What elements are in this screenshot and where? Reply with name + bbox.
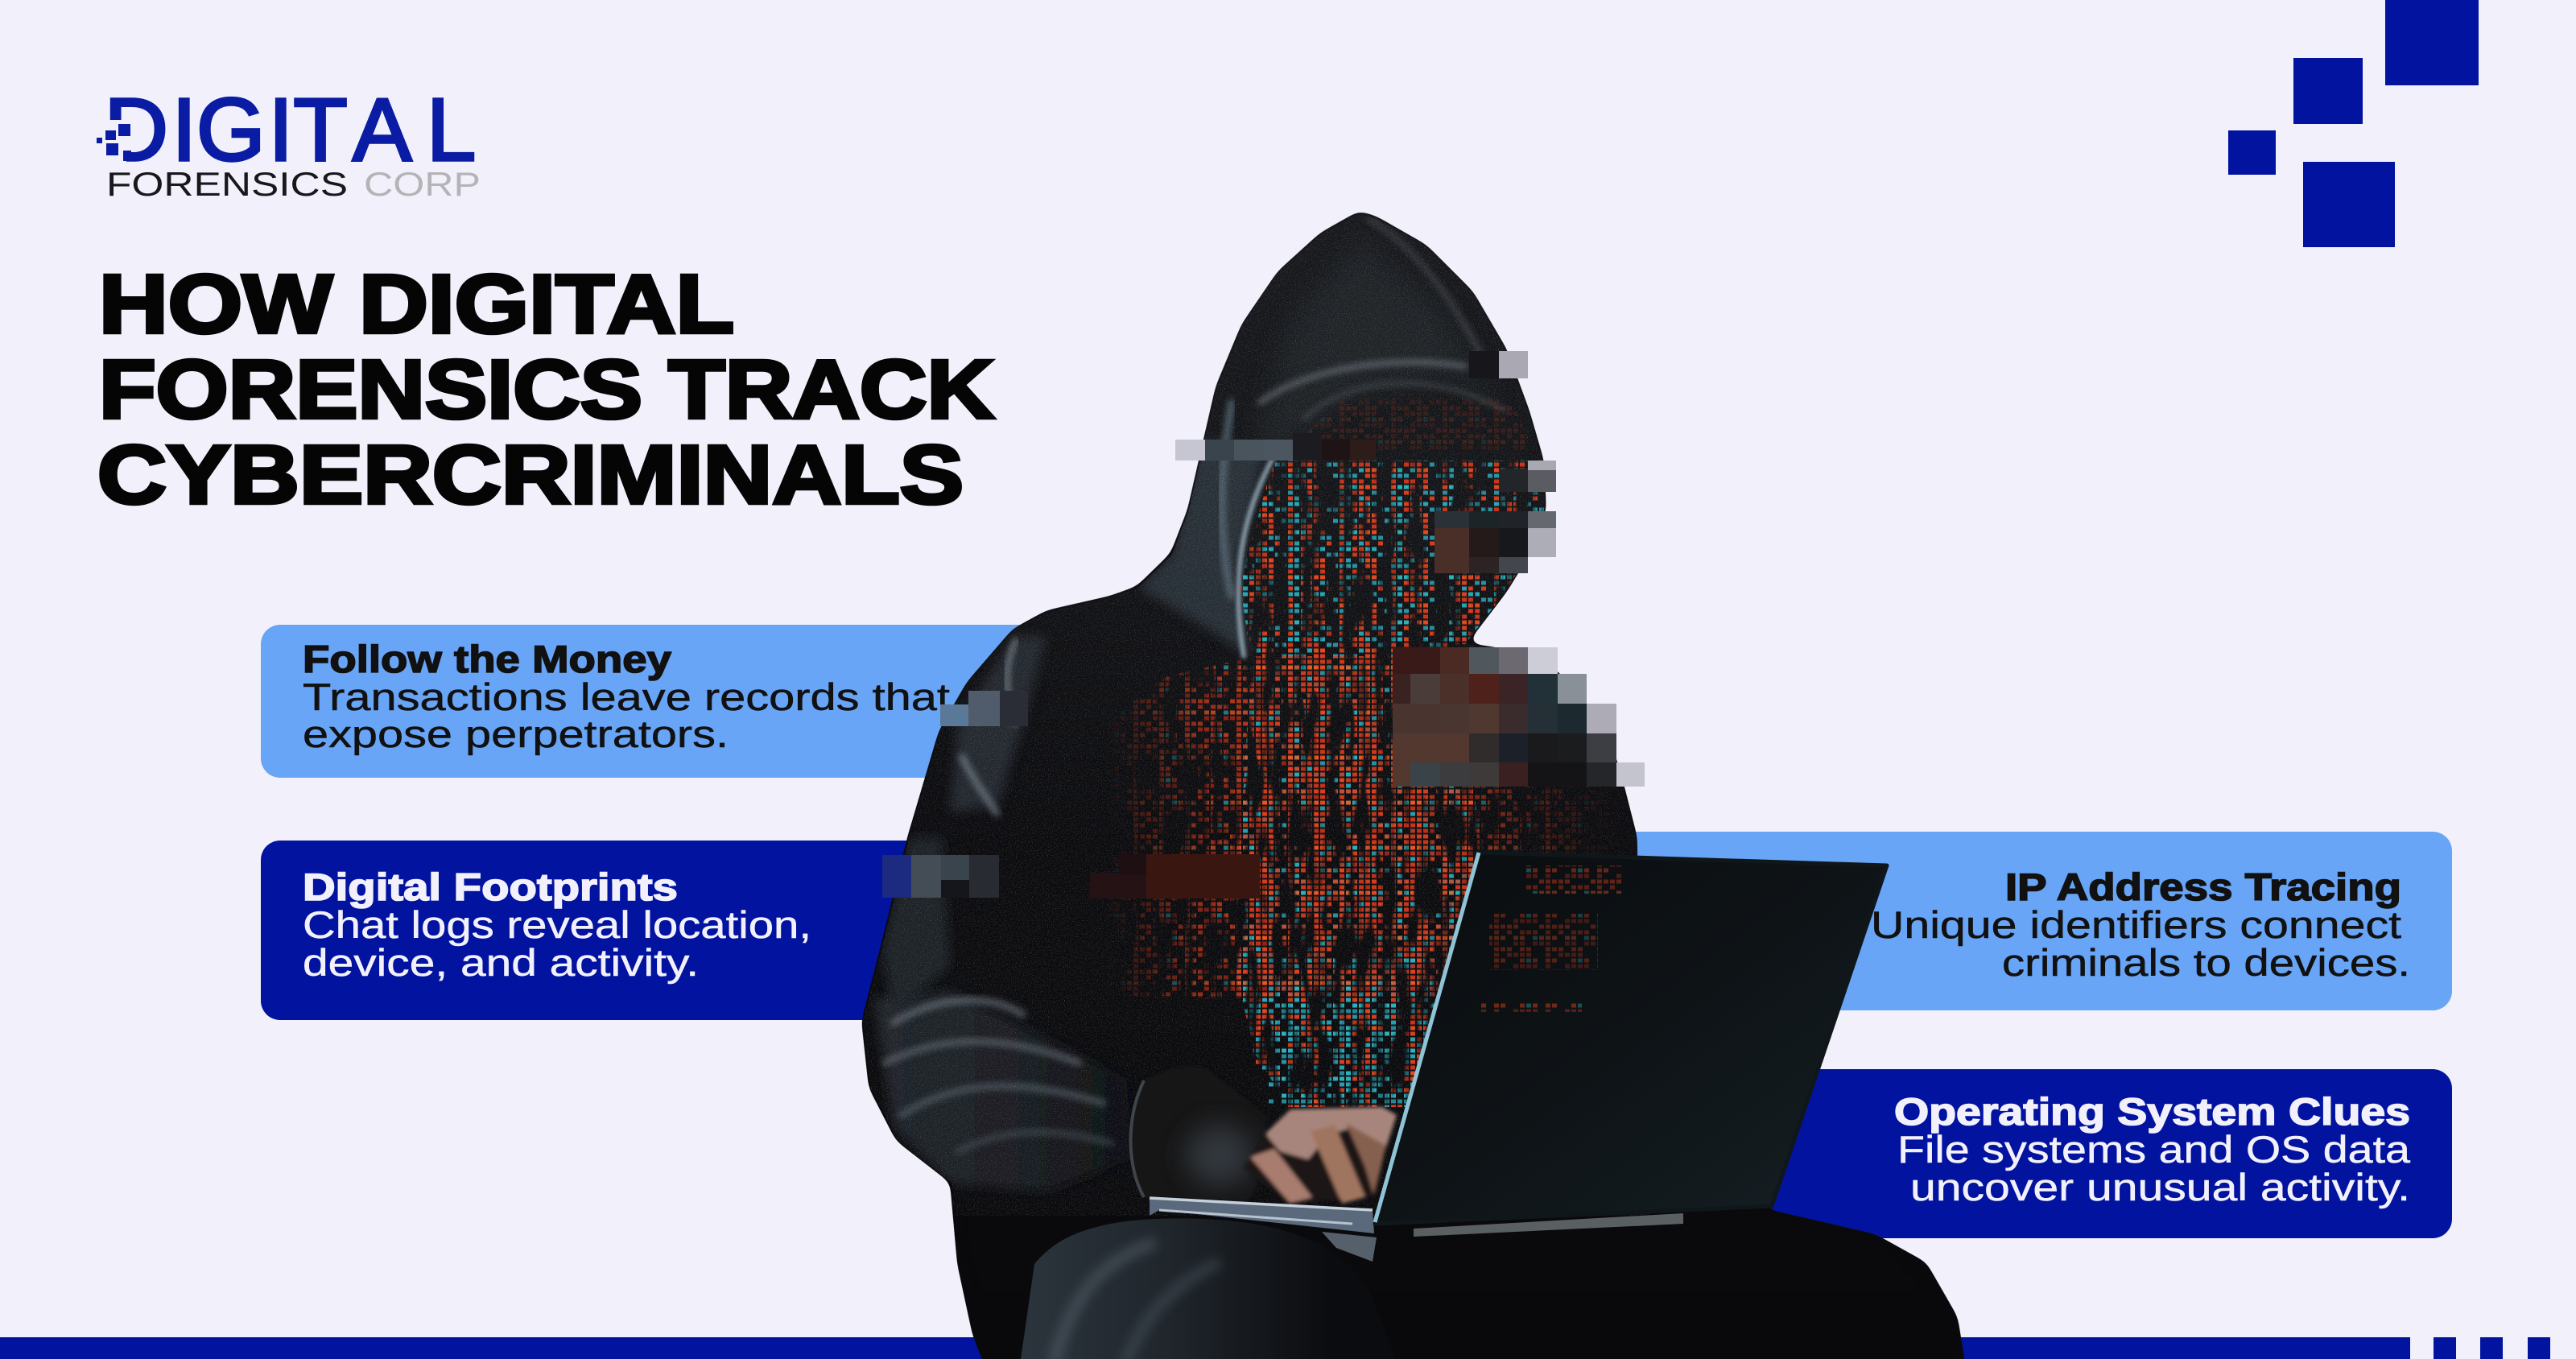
panel: Follow the Money: expose perpetrators. — [303, 713, 729, 755]
panel: Digital Footprints — [261, 841, 1026, 1020]
panel: Digital Footprints: Chat logs reveal location, — [303, 903, 811, 946]
decorative squares, top right — [2228, 0, 2479, 247]
left knee — [1016, 1218, 1409, 1359]
pixel blocks — [882, 351, 1645, 898]
panel: Follow the Money — [261, 625, 1066, 778]
laptop base — [1150, 1198, 1377, 1262]
title: HOW DIGITAL — [99, 258, 734, 350]
hooded figure with laptop — [861, 209, 1970, 1359]
panel: Operating System Clues: Operating System Clues — [1894, 1090, 2410, 1133]
panel: Operating System Clues — [1690, 1069, 2452, 1238]
logo: Digital Forensics Corp: CORP — [364, 165, 481, 203]
digital code mosaic: face and chest — [1103, 461, 1618, 1107]
digital code mosaic: sparse red above the face — [1288, 399, 1534, 451]
fabric shading and folds — [874, 219, 1505, 1192]
panel: IP Address Tracing — [1610, 832, 2452, 1010]
panel: Follow the Money: Follow the Money — [303, 638, 671, 680]
panel: Follow the Money: Transactions leave records that — [303, 675, 950, 718]
logo: Digital Forensics Corp: DIGITAL — [105, 81, 476, 180]
panel: Digital Footprints: Digital Footprints — [303, 865, 678, 908]
panel: Operating System Clues: File systems and OS data — [1897, 1128, 2411, 1171]
hand on keyboard — [1244, 1107, 1397, 1204]
digital code on laptop lid — [1481, 865, 1622, 1012]
title: CYBERCRIMINALS — [97, 428, 964, 521]
panel: IP Address Tracing: Unique identifiers connect — [1871, 903, 2401, 946]
sleeve — [1130, 1067, 1267, 1201]
title: FORENSICS TRACK — [99, 343, 994, 436]
speckled fabric texture — [861, 209, 1650, 1216]
hoodie silhouette — [861, 211, 1970, 1359]
laptop lid — [1375, 853, 1887, 1237]
title — [97, 258, 994, 521]
panel: Digital Footprints: device, and activity. — [303, 941, 699, 984]
panel: IP Address Tracing: IP Address Tracing — [2005, 865, 2401, 908]
bottom bar — [0, 1337, 2550, 1359]
logo: Digital Forensics Corp: FORENSICS — [106, 165, 348, 203]
panel: IP Address Tracing: criminals to devices. — [2002, 941, 2410, 984]
panel: Operating System Clues: uncover unusual activity. — [1910, 1166, 2410, 1208]
